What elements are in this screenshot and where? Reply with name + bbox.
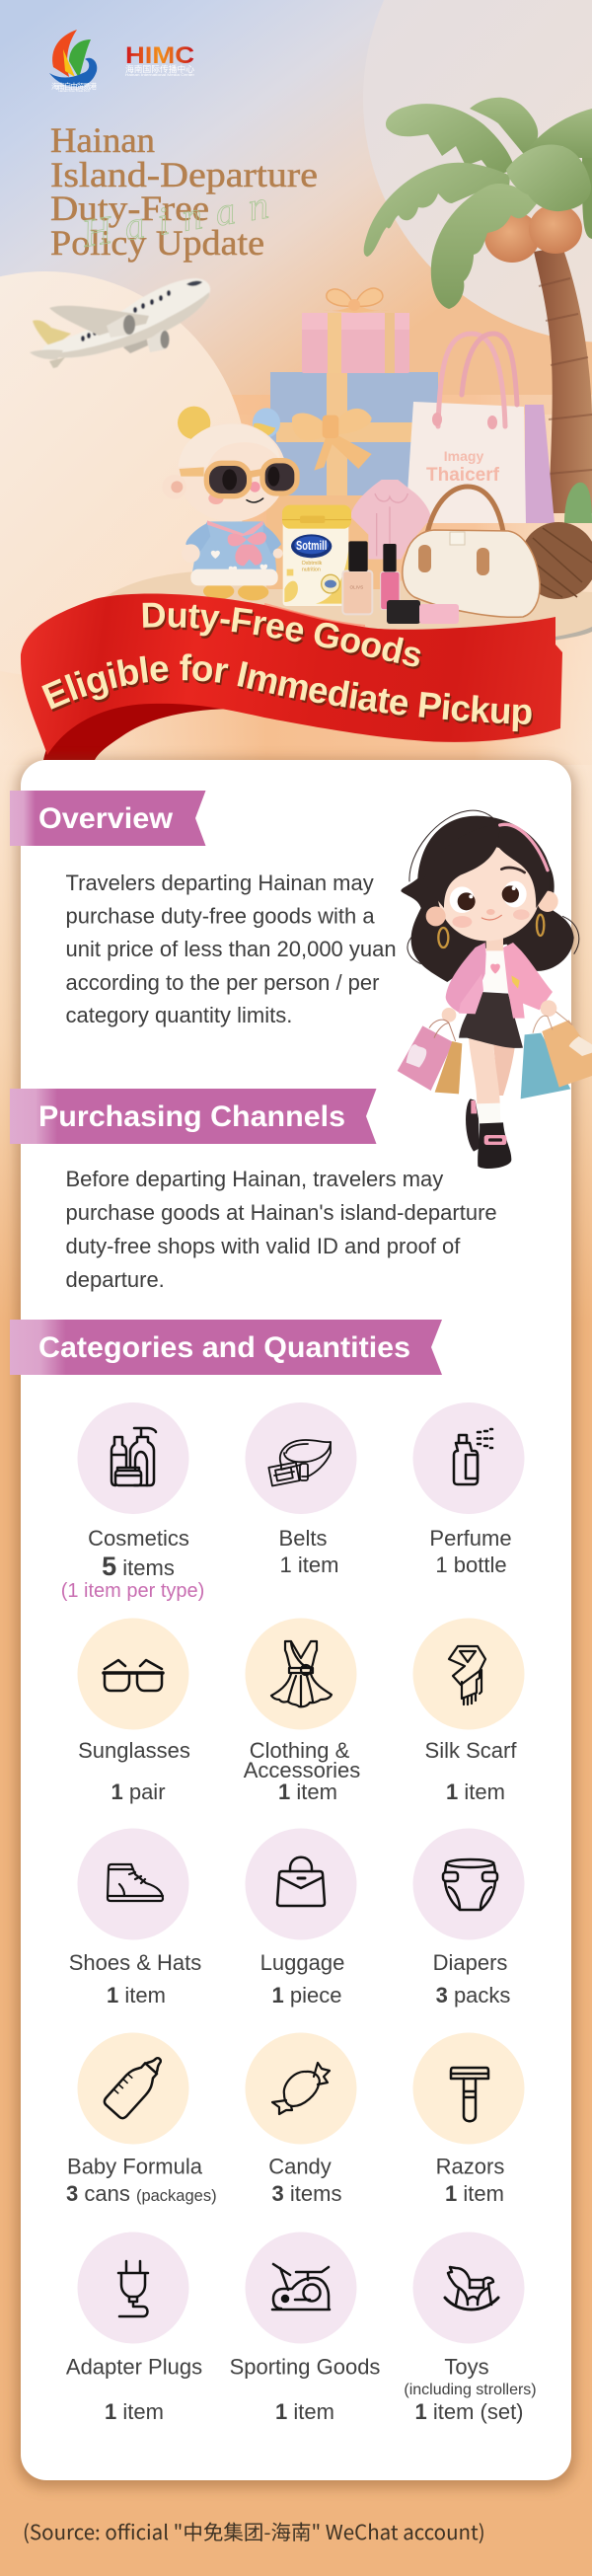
doll buns [178,407,210,439]
banner highlight [264,604,365,626]
label: Baby Formula [67,2154,203,2179]
doll feet [203,583,234,599]
nail polish: lying [387,600,459,624]
label: Shoes & Hats [69,1950,201,1975]
front leg [469,1038,500,1103]
shopping bag [406,334,555,523]
fringe [422,825,497,908]
doll cheeks and mouth [208,492,224,504]
illustration: airplane [30,278,210,368]
coconuts [484,211,540,263]
left bags [398,1025,453,1091]
formula can: Oxbtmilk [302,561,323,567]
icon: perfume [454,1429,492,1484]
quantity: 1 item [280,1553,338,1577]
label: Luggage [260,1950,344,1975]
label: Candy [268,2154,332,2179]
text: overview body: category quantity limits. [65,1003,292,1027]
label: Silk Scarf [425,1738,517,1763]
belly shade [39,292,209,357]
frond: top middle [470,98,538,158]
engines [107,315,134,338]
quantity: 1 pair [111,1780,166,1804]
frond: left [364,163,510,257]
heading: Categories and Quantities [10,1320,442,1375]
earrings [438,928,448,947]
heading: Purchasing Channels: Purchasing Channels [38,1100,345,1133]
table [95,570,592,644]
card shadow [17,760,575,2487]
icon: diaper [443,1859,497,1910]
background: large right circle [363,0,592,342]
background: left circle [0,271,248,676]
quantity: 1 item [278,1780,337,1804]
logo: HIMC: Hainan International Media Center [125,73,195,77]
category: Toys [404,2233,537,2424]
category: Shoes & Hats [69,1828,201,2008]
title: Island-Departure [50,155,318,194]
icon: candy [272,2063,330,2114]
doll skirt [190,569,278,585]
heading: Overview: Overview [38,802,174,835]
note: (including strollers) [404,2382,537,2398]
neck [486,938,503,954]
jacket [446,943,486,1014]
eyes [450,886,475,913]
logo: Hainan Free Trade Port: Hainan Free Trade Port [58,89,90,93]
label line 2: Accessories [244,1758,360,1782]
label: Perfume [429,1526,512,1551]
category: Baby Formula [66,2033,217,2206]
hair back [401,816,574,982]
note: (1 item per type) [61,1580,204,1602]
text: purchasing body: duty-free shops with valid ID and proof of [65,1234,461,1258]
gift box: peach [266,495,395,589]
label: Adapter Plugs [66,2355,202,2379]
quantity: 1 item [445,2181,504,2206]
front shoe [478,1122,511,1169]
ribbon bow on blue box [292,409,372,471]
doll sunglasses [180,467,204,477]
panel: white card [21,760,571,2480]
logo: Hainan Free Trade Port: 海南自由贸易港 [51,81,97,91]
doll head [178,422,286,521]
cheeks, nose and mouth [452,916,472,928]
icon: handbag [277,1857,325,1906]
background: hero gradient [0,0,592,415]
label: Cosmetics [88,1526,189,1551]
logo: HIMC [125,42,195,77]
category: Diapers [412,1828,525,2008]
nail polish: nude [342,541,372,614]
text: purchasing body: purchase goods at Hainan's island-departure [65,1200,497,1225]
red banner [20,594,562,760]
icon: boot [108,1864,163,1901]
hands [442,1008,456,1023]
label: Sporting Goods [230,2355,380,2379]
illustration: doll, formula and polish [162,407,431,614]
gift box: blue [270,372,438,500]
nail polish: pink [381,544,400,610]
quantity: 1 item [275,2399,334,2424]
ears [426,906,446,926]
logo: HIMC: HIMC [125,42,194,69]
nail polish: nude: OLIVS [349,585,363,590]
tailplane [30,349,63,359]
text: purchasing body: departure. [65,1267,165,1292]
windows [81,290,171,341]
back leg [493,1043,515,1096]
frond: lower left [431,184,538,309]
text: overview body: purchase duty-free goods with a [65,904,375,928]
quantity: 5 items [102,1552,175,1581]
label: Sunglasses [78,1738,190,1763]
small leaf [564,483,592,523]
formula can [282,505,351,606]
far wing [123,336,148,353]
doll bow [207,520,263,536]
label: Clothing & [250,1738,350,1763]
title: Duty-Free [50,189,209,228]
frond: top left [386,104,515,176]
doll dress [192,521,276,572]
quantity: 1 item [105,2399,164,2424]
icon: baby bottle [103,2050,170,2120]
gift box: pink [302,288,409,373]
coconut [520,522,592,599]
wing [49,306,149,336]
label: Razors [436,2154,504,2179]
right bags [521,1033,570,1099]
frond: top right [527,109,592,158]
fuselage [39,278,210,357]
frond: front [506,145,591,211]
label: Belts [279,1526,327,1551]
icon: belt [268,1440,331,1486]
category: Adapter Plugs [66,2233,202,2424]
icon: razor [451,2068,488,2121]
skirt [459,992,523,1048]
banner line 2 shadow: Eligible for Immediate Pickup [47,656,533,734]
shirt [483,950,508,992]
formula can: Sotmill [296,539,327,553]
text: overview body: according to the per person / per [65,970,379,995]
brow [501,868,525,872]
background: hero peach glow [0,395,592,765]
category: Luggage [245,1828,357,2008]
hair strands [407,810,579,964]
quantity: 3 packs [436,1983,510,2008]
quantity: 3 items [272,2181,341,2206]
category: Silk Scarf [412,1619,525,1804]
banner line 1: Duty-Free Goods [142,602,420,667]
text: overview body: unit price of less than 20,000 yuan [65,937,397,961]
heading: Purchasing Channels [10,1089,377,1144]
banner line 1 shadow: Duty-Free Goods [144,606,422,669]
title: Hainan [50,120,155,160]
text: overview body: Travelers departing Hainan may [65,871,374,895]
handles [438,334,505,426]
banner face [21,593,562,755]
category: Cosmetics [61,1402,204,1602]
trunk [534,247,592,513]
illustration: palm tree [364,98,592,513]
title [50,120,318,263]
category: Sporting Goods [230,2233,380,2424]
logo: HIMC: 海南国际传播中心 [125,64,194,74]
category: Clothing & Accessories [244,1619,360,1804]
quantity: 1 piece [272,1983,341,2008]
table edge [533,627,592,644]
label: Toys [444,2355,489,2379]
right dark frond [582,158,592,239]
banner back fold [43,702,237,760]
quantity: 1 item [107,1983,166,2008]
title: Policy Update [50,223,264,263]
sock [477,1103,500,1125]
script word: Hainan: Hainan [78,183,271,256]
quantity: 1 item (set) [414,2399,524,2424]
quantity: 3 cans (packages) [66,2181,217,2206]
formula can: nutrition [302,568,321,573]
icon: rocking horse [445,2267,498,2310]
logo: Hainan Free Trade Port [49,30,97,93]
back shoe [466,1099,480,1152]
tail bottom [49,357,65,368]
text: purchasing body: Before departing Hainan, travelers may [65,1167,443,1191]
icon: plug [118,2261,148,2316]
icon: exercise bike [272,2264,330,2310]
icon: cosmetics [111,1428,156,1485]
banner line 2: Eligible for Immediate Pickup [41,653,532,732]
shopping bag: Thaicerf [426,465,500,486]
tail fin [33,320,71,348]
heading: Overview [10,791,205,846]
illustration: girl with shopping bags [398,810,592,1169]
heading: Categories and Quantities: Categories and Quantities [38,1331,410,1364]
background: lower gradient [0,395,592,1323]
category: Belts [245,1402,357,1577]
quantity: 1 bottle [435,1553,507,1577]
illustration: handbag [403,487,540,617]
headband [500,824,548,871]
category: Sunglasses [77,1619,190,1804]
icon: dress [271,1641,332,1706]
pink jacket [350,480,431,560]
category: Razors [412,2033,525,2206]
category: Perfume [412,1402,525,1577]
bow [323,304,389,313]
category: Candy [245,2033,357,2206]
source note: (Source: official "中免集团-海南" WeChat account) [23,2516,485,2545]
label: Diapers [433,1950,507,1975]
cockpit [186,281,202,286]
icon: sunglasses [104,1660,163,1691]
quantity: 1 item [446,1780,505,1804]
icon: scarf [449,1646,485,1705]
logos [49,30,195,93]
face [437,847,540,941]
bag text: Imagy [444,448,483,464]
illustration: gifts and products [95,288,592,644]
